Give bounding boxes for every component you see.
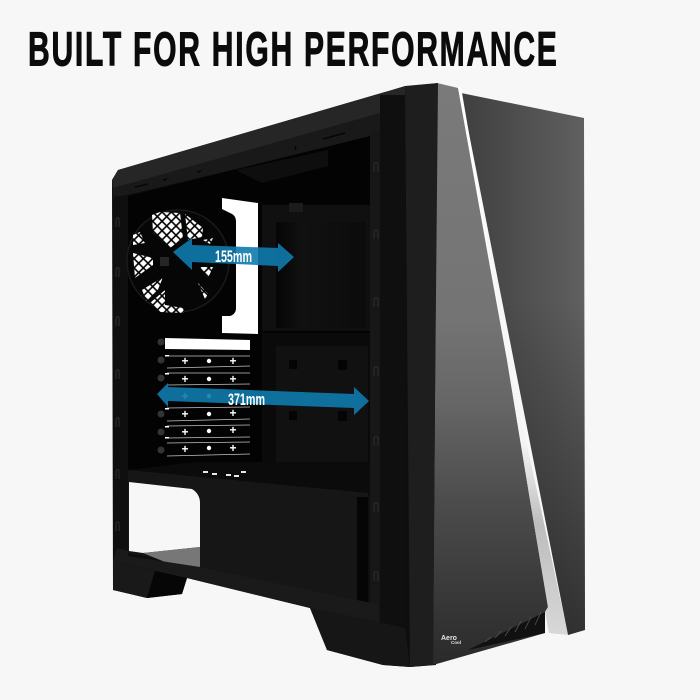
front mesh vent [468, 612, 545, 650]
top rail [113, 113, 380, 198]
slot plus marks: + [181, 407, 189, 421]
PCI white slot [165, 338, 250, 350]
slot plus marks: + [181, 389, 189, 403]
side panel [461, 93, 585, 635]
lower drive cage [262, 333, 370, 470]
right pillar [380, 95, 405, 625]
PSU opening [129, 482, 200, 553]
slot plus marks: + [229, 423, 237, 437]
left foot [113, 561, 155, 598]
arrow: 155mm [173, 238, 294, 272]
bottom rail [113, 548, 378, 622]
front panel side bevel [405, 83, 438, 667]
slot plus marks: + [181, 354, 189, 368]
slot plus marks: + [181, 442, 189, 456]
upper drive cage [262, 203, 370, 331]
front panel [433, 83, 548, 665]
fan hub [160, 257, 169, 266]
slot tick marks [165, 355, 169, 438]
floor mesh [143, 547, 200, 571]
computer case [112, 83, 585, 667]
lower cage frame [262, 333, 370, 470]
top rail slots [135, 133, 345, 187]
title: BUILT FOR HIGH PERFORMANCE [28, 21, 557, 76]
slot plus marks: + [229, 372, 237, 386]
drive cage frame [262, 205, 370, 331]
left rail [114, 196, 128, 562]
fan ring [127, 210, 229, 312]
slot plus marks: + [181, 425, 189, 439]
slot plus marks [181, 354, 237, 456]
case body [112, 83, 438, 667]
label: 371mm: 371mm [228, 390, 265, 409]
chassis clips [116, 162, 378, 581]
left foot inner [147, 571, 187, 598]
rear fan [127, 210, 229, 313]
slot lines [167, 356, 250, 456]
slot screws [158, 338, 164, 454]
white accent strip [458, 87, 568, 635]
vent slashes [485, 612, 541, 642]
slot plus marks: + [229, 354, 237, 368]
slot plus marks: + [229, 441, 237, 455]
PSU shroud [128, 470, 368, 604]
logo: Aero [441, 635, 457, 642]
PCI slot bay [158, 338, 250, 456]
drive cage opening [276, 222, 366, 328]
slot dots [207, 359, 211, 450]
screw holes [289, 360, 347, 421]
slot plus marks: + [229, 406, 237, 420]
mount bracket [289, 203, 303, 212]
interior cavity [128, 136, 370, 470]
vent highlights [203, 471, 246, 477]
bottom mesh vent [128, 462, 370, 494]
arrow: 371mm [157, 383, 369, 415]
slot plus marks: + [181, 372, 189, 386]
fan mesh gaps [133, 212, 213, 313]
clip rail [370, 132, 380, 624]
white cutout behind tray [222, 198, 258, 334]
logo [441, 635, 461, 645]
label: 155mm: 155mm [215, 247, 252, 266]
side panel shading [461, 93, 585, 635]
top mesh [236, 150, 328, 183]
PSU gap [357, 497, 368, 604]
right foot [310, 608, 410, 667]
top panel [112, 86, 405, 188]
logo: Cool [451, 640, 461, 645]
lower cage plate [276, 346, 368, 468]
